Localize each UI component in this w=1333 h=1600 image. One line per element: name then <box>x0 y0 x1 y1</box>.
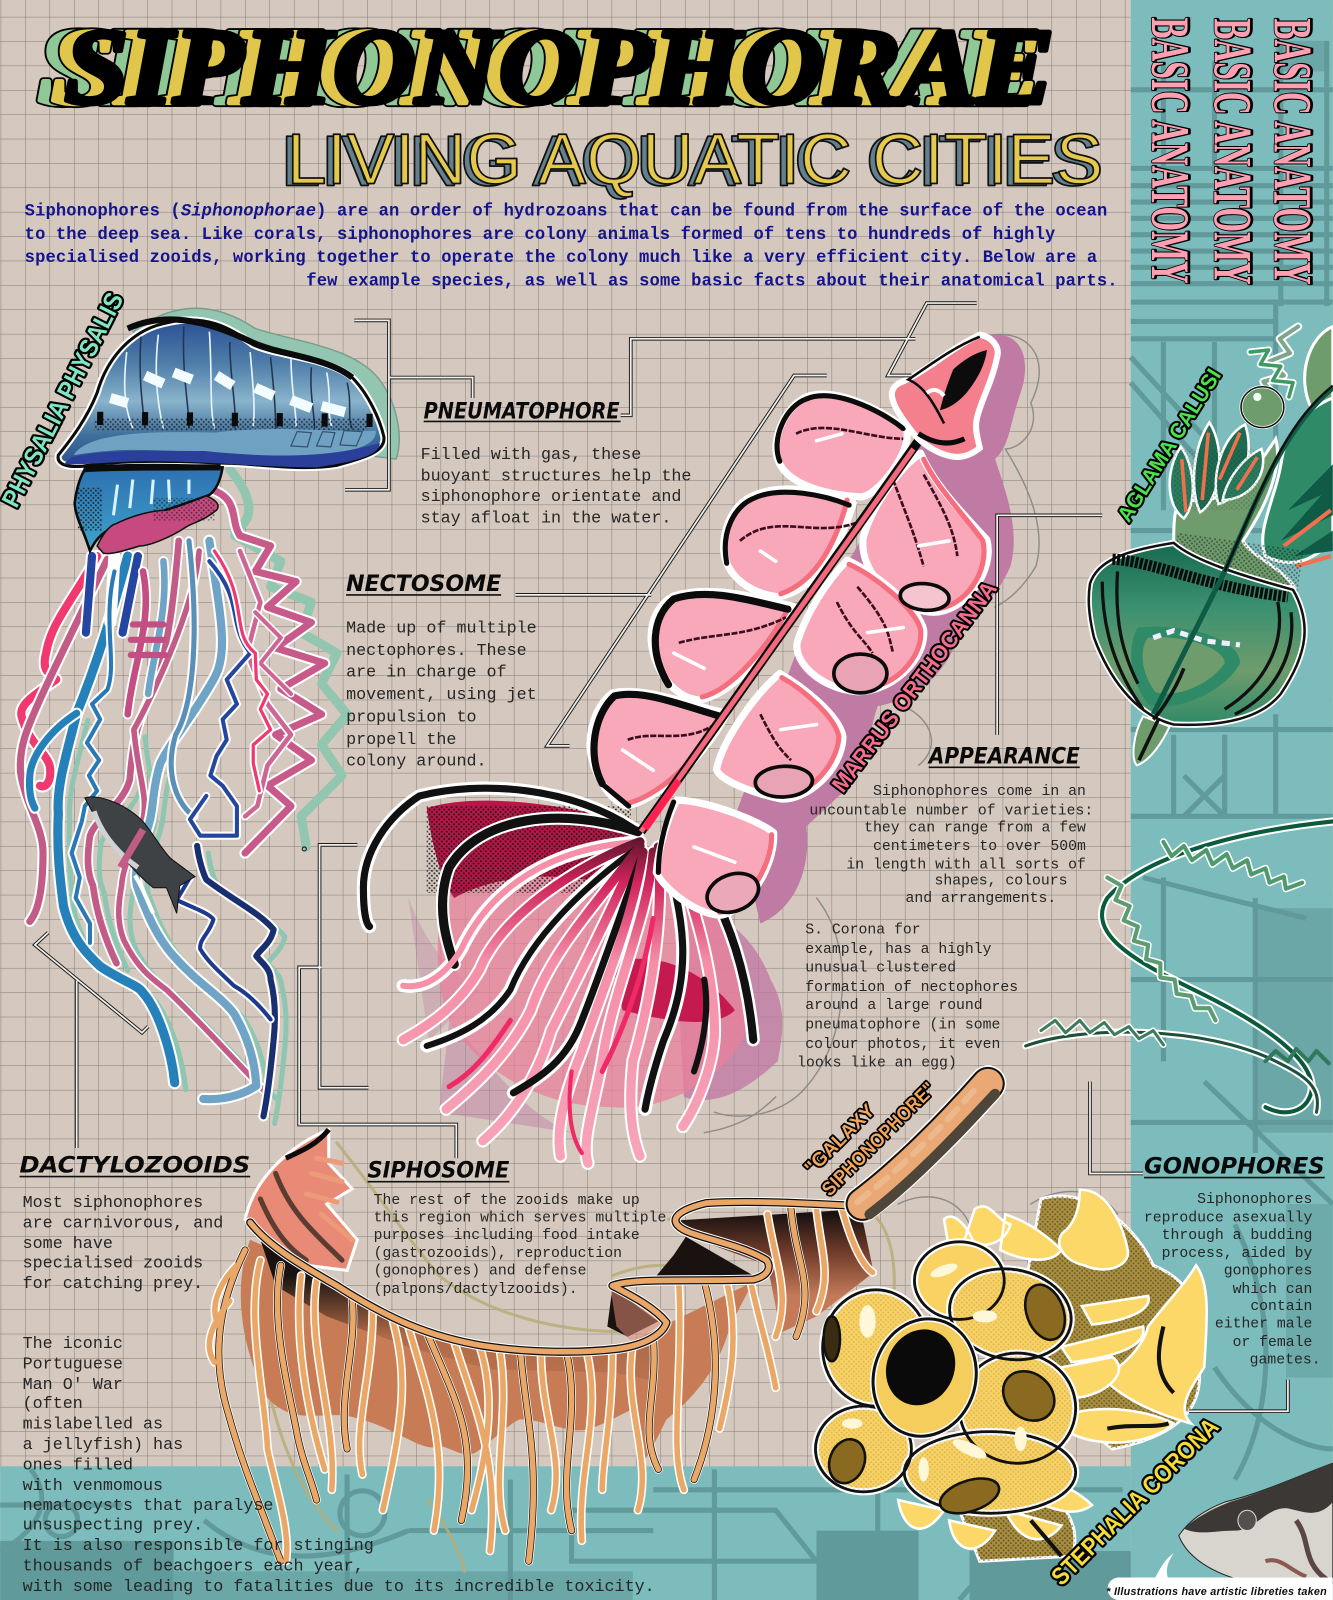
text block: gonophores: GONOPHORES <box>1144 1153 1325 1179</box>
sketch lines behind <box>898 1191 1118 1224</box>
intro text <box>25 202 1118 292</box>
text block: siphosome: (palpons/dactylzooids). <box>374 1282 578 1298</box>
text block: pneumatophore: Filled with gas, these <box>421 446 641 465</box>
label: galaxy siphonophore: SIPHONOPHORE" <box>818 1078 940 1200</box>
hanging tentacles casing <box>209 1209 873 1561</box>
text block: dactylozooids: Most siphonophores <box>23 1194 203 1213</box>
text block: S. Corona example: colour photos, it even <box>805 1037 1000 1053</box>
text block: siphosome: SIPHOSOME <box>368 1158 510 1184</box>
text block: gonophores: gonophores <box>1224 1263 1312 1279</box>
main ribbon <box>250 1202 860 1352</box>
illustration: Stephalia corona <box>815 1190 1207 1561</box>
illustration: green Agalma <box>1026 327 1333 1112</box>
segmented tip <box>857 1084 995 1214</box>
float ribs and highlights <box>97 327 378 429</box>
text block: siphosome: purposes including food intake <box>374 1228 640 1244</box>
text block: nectosome: movement, using jet <box>346 686 537 705</box>
text block: appearance <box>809 743 1093 907</box>
tentacle swirl <box>1026 821 1333 1112</box>
text block: S. Corona example: S. Corona for <box>805 923 921 939</box>
text block: dactylozooids: a jellyfish) has <box>23 1436 183 1455</box>
text block: S. Corona example: unusual clustered <box>805 960 956 976</box>
side heading: basic anatomy x3: BASIC ANATOMY <box>1140 17 1200 284</box>
text block: dactylozooids: Man O' War <box>23 1376 123 1395</box>
text block: dactylozooids: It is also responsible for stinging <box>23 1537 374 1556</box>
text block: S. Corona example <box>797 923 1018 1071</box>
connector lines <box>35 303 1288 1411</box>
pink cap <box>97 496 218 554</box>
text block: dactylozooids: some have <box>23 1235 113 1254</box>
text block: appearance: APPEARANCE <box>927 743 1080 769</box>
text block: nectosome: NECTOSOME <box>346 571 502 597</box>
subtitle: LIVING AQUATIC CITIES <box>287 120 1103 200</box>
pneumatophore <box>892 335 998 457</box>
text block: siphosome: (gonophores) and defense <box>374 1263 587 1279</box>
magenta shadow <box>408 334 1025 1133</box>
text block: S. Corona example: example, has a highly <box>805 942 992 958</box>
text block: S. Corona example: around a large round <box>805 998 983 1014</box>
upper curls <box>1250 327 1298 397</box>
text block: gonophores: gametes. <box>1250 1352 1321 1368</box>
title: SIPHONOPHORAE <box>38 8 1028 127</box>
mint shadow <box>69 308 399 1123</box>
text block: appearance: centimeters to over 500m <box>873 839 1086 855</box>
bubble <box>1108 1578 1333 1600</box>
float base band <box>74 429 376 456</box>
text block: appearance: shapes, colours <box>934 874 1068 890</box>
fronds <box>898 1190 1207 1549</box>
text block: appearance: in length with all sorts of <box>846 857 1086 873</box>
text block: S. Corona example: pneumatophore (in some <box>805 1018 1000 1034</box>
text block: dactylozooids: mislabelled as <box>23 1416 163 1435</box>
text block: pneumatophore: stay afloat in the water. <box>421 509 671 528</box>
stem <box>641 434 924 832</box>
title: SIPHONOPHORAE <box>51 8 1041 127</box>
illustration: Marrus orthocanna <box>363 334 1039 1163</box>
intro text: specialised zooids, working together to operate the colony much like a very efficient city. Below are a <box>25 249 1097 268</box>
text block: gonophores: which can <box>1233 1282 1312 1298</box>
title: SIPHONOPHORAE <box>38 8 1028 127</box>
intro text: Siphonophores (Siphonophorae) are an order of hydrozoans that can be found from the surface of the ocean <box>25 202 1107 221</box>
terracotta mass <box>241 1240 753 1466</box>
float ball <box>1241 387 1284 428</box>
fringe strands <box>363 788 753 1163</box>
side heading: basic anatomy x3: BASIC ANATOMY <box>1263 18 1323 285</box>
text block: nectosome: nectophores. These <box>346 642 527 661</box>
text block: dactylozooids <box>20 1152 655 1597</box>
bell rims <box>702 582 950 919</box>
side heading: basic anatomy x3 <box>1140 17 1324 285</box>
text block: nectosome: propell the <box>346 731 456 750</box>
text block: dactylozooids: with venmomous <box>23 1477 163 1496</box>
background: teal city strip right <box>1131 0 1333 1600</box>
text block: dactylozooids: with some leading to fatalities due to its incredible toxicity. <box>23 1578 655 1597</box>
text block: appearance: uncountable number of varieties: <box>809 803 1093 819</box>
fringe strands casing <box>363 788 753 1163</box>
crest <box>245 1130 357 1270</box>
globe openings <box>823 1279 1072 1520</box>
side heading: basic anatomy x3: BASIC ANATOMY <box>1203 18 1263 285</box>
side heading: basic anatomy x3: BASIC ANATOMY <box>1202 18 1262 285</box>
text block: dactylozooids: thousands of beachgoers each year, <box>23 1557 364 1576</box>
label: Marrus orthocanna: MARRUS ORTHOCANNA <box>827 576 1002 797</box>
intro text: to the deep sea. Like corals, siphonophores are colony animals formed of tens to hundreds of highly <box>25 226 1055 245</box>
text block: dactylozooids: specialised zooids <box>23 1254 203 1273</box>
fingers <box>1170 422 1263 518</box>
text block: dactylozooids: Portuguese <box>23 1355 123 1374</box>
gray sketch lines <box>704 334 1039 1133</box>
label: galaxy siphonophore: "GALAXY <box>800 1100 880 1179</box>
text block: pneumatophore: PNEUMATOPHORE <box>424 398 620 424</box>
fringe dark band <box>427 801 638 898</box>
bulb <box>1089 543 1305 725</box>
title: SIPHONOPHORAE <box>64 8 1054 127</box>
text block: dactylozooids: are carnivorous, and <box>23 1215 223 1234</box>
text block: gonophores: process, aided by <box>1162 1246 1313 1262</box>
subtitle: LIVING AQUATIC CITIES <box>281 122 1097 202</box>
nectophore bells <box>590 394 988 915</box>
right lobes <box>1305 327 1333 434</box>
text block: dactylozooids: nematocysts that paralyse <box>23 1497 273 1516</box>
text block: pneumatophore: buoyant structures help the <box>421 468 691 487</box>
text block: S. Corona example: formation of nectophores <box>805 980 1018 996</box>
label: Stephalia corona: STEPHALIA CORONA <box>1047 1413 1225 1591</box>
text block: appearance: they can range from a few <box>864 821 1086 837</box>
tip <box>1133 716 1170 765</box>
float <box>58 320 384 468</box>
text block: nectosome: Made up of multiple <box>346 620 537 639</box>
central ring <box>860 1307 989 1448</box>
bag <box>75 465 223 551</box>
bell salmon edges <box>629 459 984 912</box>
text block: dactylozooids: for catching prey. <box>23 1275 203 1294</box>
text block: dactylozooids: DACTYLOZOOIDS <box>20 1152 250 1178</box>
text block: pneumatophore: siphonophore orientate and <box>421 488 681 507</box>
text block: appearance: and arrangements. <box>905 891 1056 907</box>
text block: siphosome <box>368 1158 666 1298</box>
text block: gonophores: through a budding <box>1162 1228 1312 1244</box>
bubble tail <box>1153 1553 1174 1584</box>
side heading: basic anatomy x3: BASIC ANATOMY <box>1141 17 1201 284</box>
text block: gonophores <box>1144 1153 1325 1368</box>
background: teal city strip bottom <box>0 1466 1131 1600</box>
stalk and hand <box>1174 439 1294 587</box>
text block: dactylozooids: The iconic <box>23 1335 123 1354</box>
bell veins <box>628 428 957 760</box>
bell black outlines <box>594 396 903 872</box>
text block: gonophores: or female <box>1233 1335 1312 1351</box>
text block: gonophores: contain <box>1250 1299 1312 1315</box>
text block: nectosome: colony around. <box>346 752 487 771</box>
text block: dactylozooids: (often <box>23 1395 83 1414</box>
text block: appearance: Siphonophores come in an <box>873 784 1086 800</box>
fish <box>1179 1463 1333 1584</box>
label: Agalma calusi: AGLAMA CALUSI <box>1113 365 1226 526</box>
text block: siphosome: this region which serves multiple <box>374 1210 666 1226</box>
text block: gonophores: Siphonophores <box>1197 1192 1312 1208</box>
text block: dactylozooids: unsuspecting prey. <box>23 1517 203 1536</box>
side heading: basic anatomy x3: BASIC ANATOMY <box>1264 18 1324 285</box>
globes <box>815 1242 1078 1513</box>
text block: gonophores: reproduce asexually <box>1144 1210 1313 1226</box>
text block: siphosome: The rest of the zooids make up <box>374 1193 640 1209</box>
illustration: galaxy siphonophore <box>209 1084 995 1571</box>
illustration: Physalia physalis <box>20 308 399 1123</box>
fringe underlay <box>438 843 750 1108</box>
text block: nectosome: are in charge of <box>346 664 507 683</box>
text block: S. Corona example: looks like an egg) <box>797 1055 957 1071</box>
footnote text: * Illustrations have artistic libreties taken <box>1106 1586 1327 1598</box>
frill tentacles <box>212 490 325 853</box>
text block: siphosome: (gastrozooids), reproduction <box>374 1246 622 1262</box>
fish caught in tentacles <box>85 797 195 913</box>
back fronds <box>959 1196 1203 1561</box>
tentacles <box>20 541 275 1116</box>
text block: nectosome <box>346 571 537 771</box>
olive sketch shadow <box>271 1143 894 1571</box>
title: SIPHONOPHORAE <box>51 8 1041 127</box>
text block: dactylozooids: ones filled <box>23 1456 133 1475</box>
intro text: few example species, as well as some basic facts about their anatomical parts. <box>306 273 1118 292</box>
text block: nectosome: propulsion to <box>346 708 477 727</box>
text block: pneumatophore <box>421 398 691 528</box>
globe highlights <box>842 1261 1027 1482</box>
fish photo and footnote bubble <box>1106 1463 1333 1600</box>
label: Physalia physalis: PHYSALIA PHYSALIS <box>0 288 129 512</box>
text block: gonophores: either male <box>1215 1317 1312 1333</box>
